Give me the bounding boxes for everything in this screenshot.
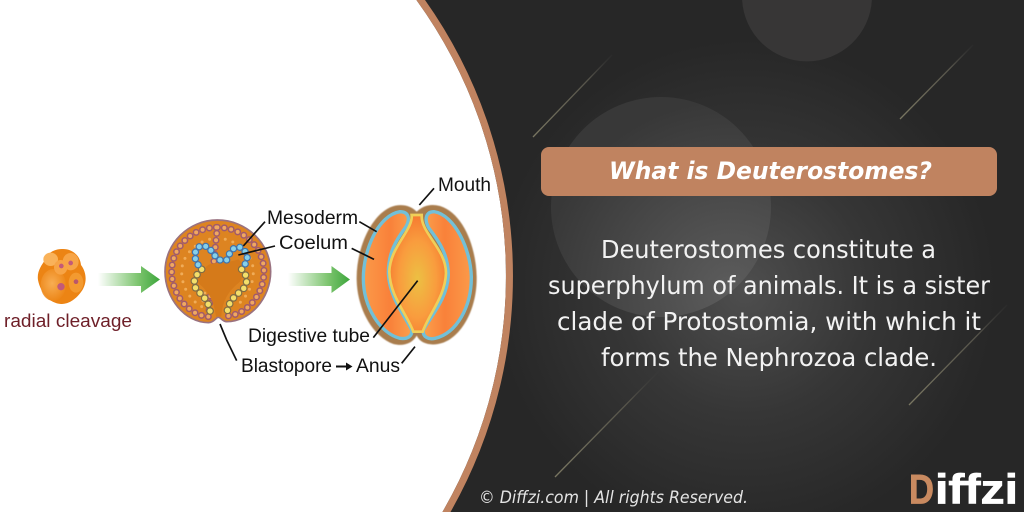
body paragraph: forms the Nephrozoa clade. xyxy=(601,343,937,372)
gastrula body xyxy=(165,220,271,323)
body paragraph xyxy=(548,235,991,372)
speckled mesenchyme xyxy=(182,238,253,307)
copyright footer: © Diffzi.com | All rights Reserved. xyxy=(479,488,748,508)
arrow: cleavage to gastrula xyxy=(98,266,160,293)
white curved panel xyxy=(0,0,506,512)
heading text: What is Deuterostomes? xyxy=(609,157,932,185)
diagram: gastrula with forming coelom xyxy=(165,220,271,323)
logo: Diffzi xyxy=(909,466,1018,512)
body paragraph: superphylum of animals. It is a sister xyxy=(548,271,991,300)
right coelom lobe xyxy=(423,212,471,339)
central digestive tube xyxy=(389,215,446,332)
left coelom lobe xyxy=(363,212,412,339)
label: Blastopore: Blastopore xyxy=(241,356,332,377)
heading bar xyxy=(541,147,997,196)
yellow endoderm cells xyxy=(194,269,247,317)
outer cell ring xyxy=(172,227,264,317)
blue mesoderm cells xyxy=(195,246,247,268)
logo: Diffzi: iffzi xyxy=(935,466,1018,512)
leader lines xyxy=(220,188,434,363)
decorative top circle xyxy=(742,0,872,61)
arrow: gastrula to coelomate xyxy=(288,266,350,293)
logo: Diffzi: D xyxy=(909,466,934,512)
label: Coelum: Coelum xyxy=(279,233,348,254)
accent diagonal lines xyxy=(533,45,1007,477)
diagram: deuterostome embryo xyxy=(357,205,477,345)
body paragraph: Deuterostomes constitute a xyxy=(601,235,936,264)
caption: radial cleavage: radial cleavage xyxy=(4,310,132,331)
label: Mouth: Mouth xyxy=(438,175,491,196)
icon: radial cleavage embryo xyxy=(38,249,86,304)
decorative large circle xyxy=(551,97,771,317)
outer body wall xyxy=(357,205,477,345)
small arrow: blastopore becomes anus xyxy=(336,362,352,370)
label: Anus: Anus xyxy=(356,356,400,377)
label: Digestive tube: Digestive tube xyxy=(248,326,370,347)
label: Mesoderm: Mesoderm xyxy=(267,208,358,229)
central lumen xyxy=(198,259,244,317)
body paragraph: clade of Protostomia, with which it xyxy=(557,307,981,336)
copper curved edge xyxy=(416,0,513,512)
